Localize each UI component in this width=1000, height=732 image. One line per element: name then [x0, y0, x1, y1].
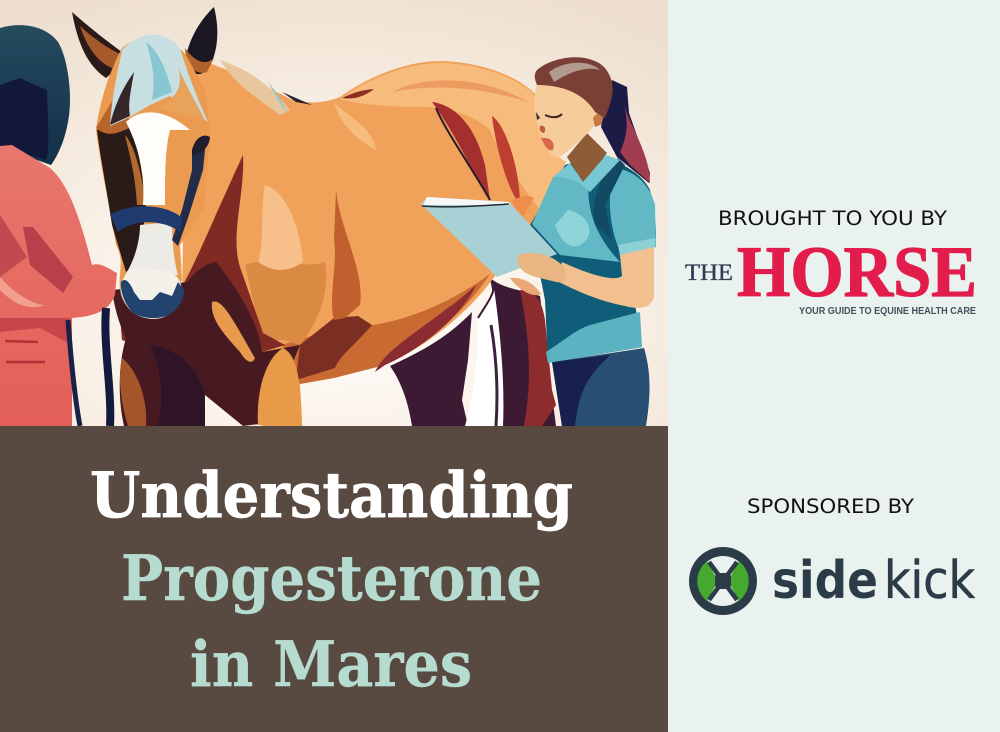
horse body	[120, 55, 566, 426]
forelock	[110, 35, 208, 126]
logo: Sidekick	[689, 547, 975, 615]
tail	[465, 288, 503, 426]
hair	[0, 25, 70, 165]
muzzle	[120, 275, 182, 319]
face	[534, 83, 600, 157]
horse rump highlights	[334, 63, 566, 222]
title panel	[0, 426, 668, 732]
shoulder blaze	[212, 301, 255, 362]
lead rope	[68, 320, 80, 426]
jeans	[552, 348, 650, 426]
horse shoulder and chest shading	[112, 155, 302, 426]
shirt	[530, 155, 656, 363]
hair cap	[535, 57, 613, 118]
neck	[567, 133, 607, 184]
right sponsor panel	[668, 0, 1000, 732]
knee	[258, 348, 302, 426]
ponytail	[601, 80, 650, 183]
mane	[220, 60, 290, 115]
logo: The Horse: HORSE	[737, 232, 977, 312]
title line: Understanding: Understanding	[90, 458, 573, 532]
horse flank shadow	[245, 185, 490, 384]
hand	[517, 253, 566, 282]
bridle	[172, 140, 206, 246]
logo: Sidekick: side	[772, 551, 878, 611]
right ear	[185, 7, 217, 74]
logo: Sidekick: kick	[884, 551, 975, 611]
logo: The Horse: YOUR GUIDE TO EQUINE HEALTH CARE	[799, 306, 977, 317]
logo mark	[689, 547, 757, 615]
notebook	[421, 197, 557, 277]
horse head	[72, 7, 312, 319]
woman at left	[0, 25, 117, 426]
arm	[555, 247, 654, 308]
title line: Progesterone: Progesterone	[121, 541, 542, 615]
left ear	[72, 12, 122, 78]
jacket	[0, 145, 117, 426]
credit: sponsored by: SPONSORED BY	[747, 495, 914, 518]
dark face side	[97, 118, 146, 272]
face	[96, 38, 210, 318]
collar	[554, 155, 620, 192]
illustration: vet and horse	[0, 0, 668, 426]
title line: in Mares: in Mares	[190, 627, 472, 701]
logo: The Horse: THE	[685, 260, 733, 285]
credit: brought to you by: BROUGHT TO YOU BY	[718, 207, 947, 230]
white blaze	[126, 112, 190, 205]
strap	[594, 158, 625, 240]
horse hind legs	[390, 278, 556, 426]
vet at right	[421, 57, 656, 426]
